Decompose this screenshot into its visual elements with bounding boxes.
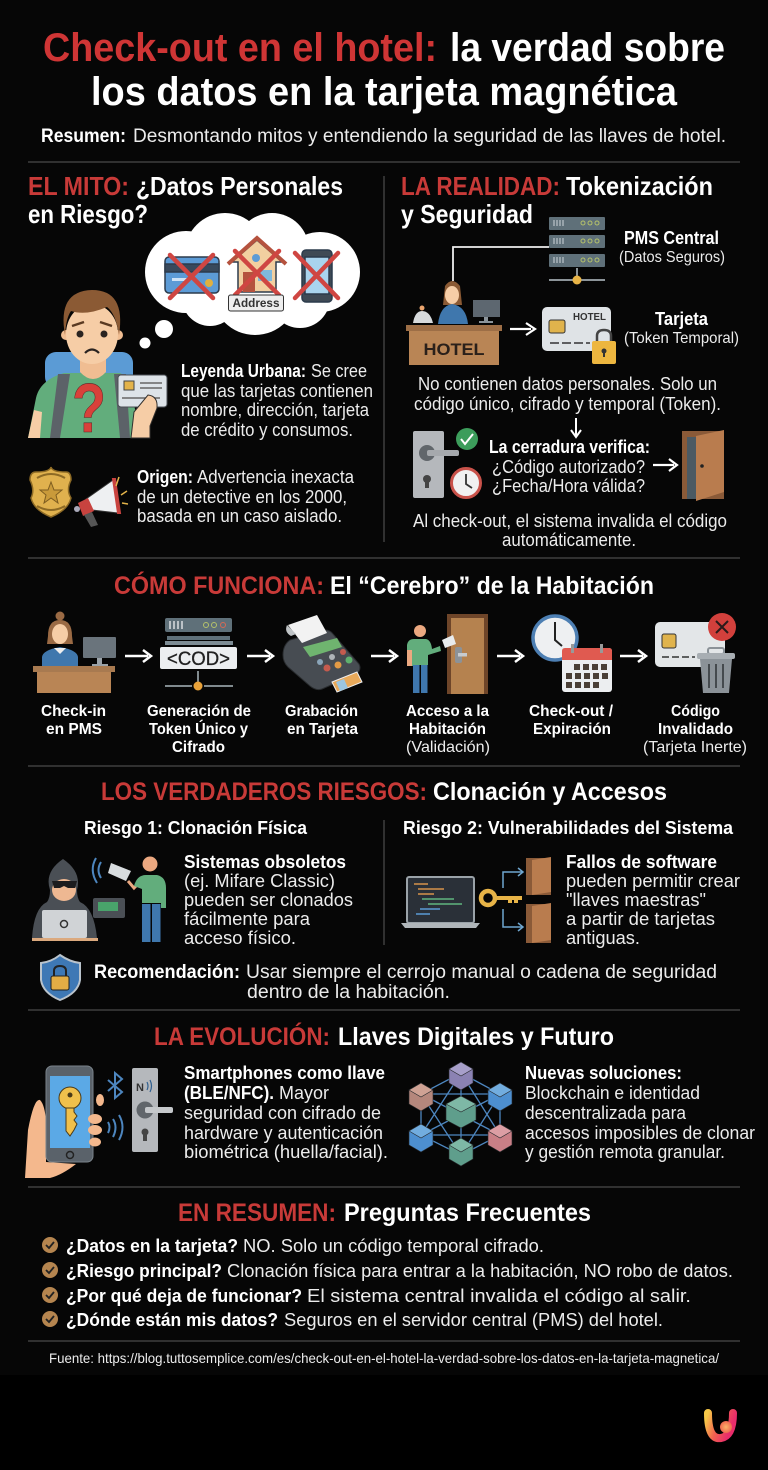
- icon: shield with lock: [41, 955, 80, 1000]
- text: no contienen datos: código único, cifrado y temporal (Token).: [414, 394, 721, 414]
- text: fallos de software: "llaves maestras": [566, 890, 706, 910]
- faq 1: [66, 1235, 544, 1256]
- icon: door lock check: [413, 428, 480, 498]
- arrow: [125, 650, 151, 662]
- text: leyenda urbana: que las tarjetas contienen: [181, 381, 373, 401]
- text: nuevas soluciones: [525, 1063, 755, 1162]
- heading: la realidad: y Seguridad: [401, 199, 533, 229]
- text: pms central: (Datos Seguros): [619, 249, 725, 266]
- heading: riesgos: Clonación y Accesos: [433, 778, 667, 806]
- heading: riesgos: LOS VERDADEROS RIESGOS:: [101, 778, 427, 806]
- text: nuevas soluciones: y gestión remota granular.: [525, 1142, 725, 1162]
- text: sistemas obsoletos: [184, 852, 353, 948]
- text: pms central: [619, 228, 725, 266]
- icon: check-in receptionist: [33, 612, 116, 693]
- arrow: [653, 459, 677, 471]
- heading: cómo funciona: El “Cerebro” de la Habitación: [330, 572, 654, 600]
- text: nuevas soluciones: accesos imposibles de clonar: [525, 1123, 755, 1143]
- heading: la evolución: Llaves Digitales y Futuro: [338, 1023, 614, 1051]
- panel: el mito: [28, 171, 373, 527]
- faq 4: Seguros en el servidor central (PMS) del hotel.: [284, 1309, 663, 1330]
- icon: smartphone key: [25, 1066, 104, 1178]
- icon: thought cloud: [140, 213, 360, 348]
- step labels: Cifrado: [172, 739, 225, 756]
- text: la cerradura verifica: La cerradura verifica:: [489, 437, 650, 457]
- faq 4: [66, 1309, 663, 1330]
- icon: token code: <COD>: [167, 649, 230, 670]
- text: origen: [137, 467, 355, 526]
- step labels: Habitación: [409, 721, 486, 738]
- heading: el mito: ¿Datos Personales: [136, 171, 343, 201]
- step labels: en PMS: [46, 721, 102, 738]
- heading: en resumen: [178, 1199, 591, 1227]
- icon: hotel reception: [406, 281, 502, 365]
- icon: hacker cloning card: [32, 856, 166, 942]
- text: no contienen datos: [414, 374, 721, 414]
- title: la verdad sobre: [450, 26, 725, 70]
- icon: hotel key card with lock: HOTEL: [573, 312, 606, 323]
- text: sistemas obsoletos: acceso físico.: [184, 928, 296, 948]
- text: fallos de software: pueden permitir crear: [566, 871, 740, 891]
- text: leyenda urbana: de crédito y consumos.: [181, 420, 353, 440]
- faq 3: [66, 1285, 691, 1306]
- text: tarjeta: [624, 309, 739, 347]
- step labels: Acceso a la: [406, 703, 489, 720]
- subheading: riesgo 2: Riesgo 2: Vulnerabilidades del Sistema: [403, 818, 734, 838]
- panel: riesgos: [32, 778, 740, 1003]
- text: origen: de un detective en los 2000,: [137, 487, 347, 507]
- panel: preguntas frecuentes: [42, 1199, 733, 1330]
- text: al check-out: automáticamente.: [502, 530, 636, 550]
- text: la cerradura verifica: ¿Fecha/Hora válida?: [492, 476, 645, 496]
- icon: worried person: ?: [72, 369, 106, 447]
- icon: hotel key card with lock: [542, 307, 616, 364]
- heading: en resumen: EN RESUMEN:: [178, 1199, 336, 1227]
- heading: el mito: [28, 171, 343, 229]
- title: [43, 26, 725, 114]
- heading: la evolución: [154, 1021, 614, 1051]
- arrow: [371, 650, 397, 662]
- summary: Resumen:: [41, 126, 126, 147]
- icon: detective badge: [30, 467, 71, 517]
- faq 3: ¿Por qué deja de funcionar?: [66, 1285, 302, 1306]
- panel: la realidad: [401, 171, 739, 550]
- arrow: [497, 650, 523, 662]
- step labels: Token Único y: [149, 719, 248, 738]
- text: smartphones como llave: seguridad con cifrado de: [184, 1103, 381, 1123]
- panel: la evolución: [25, 1021, 755, 1178]
- text: leyenda urbana: Se cree: [311, 361, 367, 381]
- step labels: (Tarjeta Inerte): [643, 739, 747, 756]
- text: pms central: PMS Central: [624, 228, 719, 248]
- faq 2: Clonación física para entrar a la habitación, NO robo de datos.: [227, 1260, 733, 1281]
- icon: bluetooth and nfc lock: N: [136, 1082, 144, 1094]
- faq 3: El sistema central invalida el código al salir.: [307, 1285, 691, 1306]
- heading: cómo funciona: CÓMO FUNCIONA:: [114, 570, 324, 600]
- text: fallos de software: antiguas.: [566, 928, 640, 948]
- step labels: Generación de: [147, 703, 251, 720]
- heading: la realidad: Tokenización: [566, 171, 713, 201]
- heading: el mito: en Riesgo?: [28, 199, 148, 229]
- text: no contienen datos: No contienen datos personales. Solo un: [418, 374, 717, 394]
- heading: el mito: EL MITO:: [28, 171, 129, 201]
- summary: Desmontando mitos y entendiendo la seguridad de las llaves de hotel.: [133, 126, 726, 147]
- title: Check-out en el hotel:: [43, 26, 437, 70]
- text: sistemas obsoletos: pueden ser clonados: [184, 890, 353, 910]
- heading: en resumen: Preguntas Frecuentes: [344, 1199, 591, 1227]
- heading: cómo funciona: [114, 570, 654, 600]
- step labels: Invalidado: [658, 721, 733, 738]
- faq 2: ¿Riesgo principal?: [66, 1260, 222, 1281]
- text: sistemas obsoletos: fácilmente para: [184, 909, 311, 929]
- text: la cerradura verifica: [489, 437, 650, 496]
- step labels: Grabación: [285, 703, 358, 720]
- text: smartphones como llave: Mayor: [279, 1083, 329, 1103]
- text: origen: Advertencia inexacta: [197, 467, 355, 487]
- faq 4: ¿Dónde están mis datos?: [66, 1309, 278, 1330]
- heading: la realidad: LA REALIDAD:: [401, 171, 560, 201]
- dividers: [28, 162, 740, 1341]
- text: fallos de software: a partir de tarjetas: [566, 909, 715, 929]
- text: fallos de software: [566, 852, 740, 948]
- text: leyenda urbana: [181, 361, 373, 440]
- arrow: down: [571, 418, 581, 437]
- text: recomendación: Usar siempre el cerrojo manual o cadena de seguridad: [246, 962, 717, 983]
- step labels: (Validación): [406, 739, 490, 756]
- icon: worried person: [28, 290, 167, 447]
- text: leyenda urbana: Leyenda Urbana:: [181, 361, 306, 381]
- icon: open door: [682, 430, 724, 501]
- icon: bluetooth and nfc lock: [108, 1068, 173, 1152]
- step labels: Código: [671, 703, 720, 720]
- icon: blockchain network: [409, 1062, 512, 1166]
- text: smartphones como llave: biométrica (huella/facial).: [184, 1142, 388, 1162]
- text: sistemas obsoletos: (ej. Mifare Classic): [184, 871, 335, 891]
- text: recomendación: dentro de la habitación.: [247, 982, 450, 1003]
- text: smartphones como llave: Smartphones como llave: [184, 1063, 385, 1083]
- heading: riesgos: [101, 778, 667, 806]
- step labels: Check-in: [41, 703, 106, 720]
- logo: [708, 1413, 733, 1438]
- step labels: en Tarjeta: [287, 721, 358, 738]
- icon: clock and calendar: [533, 616, 612, 692]
- icon: token code: [160, 618, 237, 690]
- icon: central server: [453, 217, 605, 284]
- text: fallos de software: Fallos de software: [566, 852, 717, 872]
- arrow: [510, 323, 535, 335]
- icons: check badges: [42, 1237, 58, 1327]
- arrow: [620, 650, 646, 662]
- text: recomendación: Recomendación:: [94, 962, 240, 983]
- title: los datos en la tarjeta magnética: [91, 70, 678, 114]
- heading: la realidad: [401, 171, 713, 229]
- step labels: Expiración: [533, 721, 611, 738]
- source: Fuente: https://blog.tuttosemplice.com/es/check-out-en-el-hotel-la-verdad-sobre-los-datos-en-la-tarjeta-magnetica/: [49, 1350, 719, 1366]
- icon: laptop key and doors: [401, 857, 551, 943]
- text: smartphones como llave: [184, 1063, 388, 1162]
- icon: person opening door: [407, 614, 488, 694]
- arrow: [247, 650, 273, 662]
- text: leyenda urbana: nombre, dirección, tarjeta: [181, 400, 370, 420]
- subheading: riesgo 1: Riesgo 1: Clonación Física: [84, 818, 308, 838]
- icon: megaphone: [74, 477, 128, 527]
- icon: thought cloud: Address: [232, 296, 280, 310]
- text: tarjeta: (Token Temporal): [624, 330, 739, 347]
- text: al check-out: [413, 511, 727, 550]
- faq 1: NO. Solo un código temporal cifrado.: [243, 1235, 544, 1256]
- panel: cómo funciona: [33, 570, 747, 756]
- text: sistemas obsoletos: Sistemas obsoletos: [184, 852, 346, 872]
- heading: la evolución: LA EVOLUCIÓN:: [154, 1021, 330, 1051]
- icon: hotel reception: HOTEL: [424, 340, 484, 359]
- faq 1: ¿Datos en la tarjeta?: [66, 1235, 238, 1256]
- text: la cerradura verifica: ¿Código autorizado?: [492, 457, 645, 477]
- text: smartphones como llave: hardware y autenticación: [184, 1123, 383, 1143]
- text: recomendación: [94, 962, 717, 1003]
- text: nuevas soluciones: descentralizada para: [525, 1103, 687, 1123]
- text: nuevas soluciones: Nuevas soluciones:: [525, 1063, 682, 1083]
- text: tarjeta: Tarjeta: [655, 309, 709, 329]
- step labels: [41, 703, 747, 756]
- icon: card encoder terminal: [283, 615, 362, 692]
- text: origen: basada en un caso aislado.: [137, 506, 342, 526]
- text: nuevas soluciones: Blockchain e identidad: [525, 1083, 700, 1103]
- text: smartphones como llave: (BLE/NFC).: [184, 1083, 274, 1103]
- icon: invalidated card and bin: [655, 613, 736, 693]
- step labels: Check-out /: [529, 703, 614, 720]
- text: origen: Origen:: [137, 467, 193, 487]
- text: al check-out: Al check-out, el sistema invalida el código: [413, 511, 727, 531]
